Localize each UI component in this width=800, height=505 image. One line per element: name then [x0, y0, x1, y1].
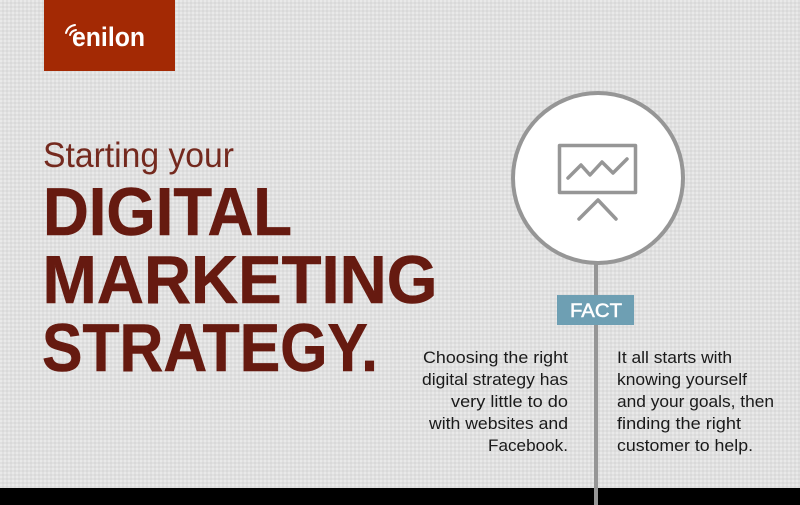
- left fact text: with websites and: [428, 414, 568, 433]
- right fact text: It all starts with: [617, 348, 732, 367]
- left fact text: [422, 348, 568, 455]
- left fact text: Choosing the right: [423, 348, 568, 367]
- icon: presentation chart: [560, 146, 636, 219]
- timeline connector: [594, 262, 598, 505]
- right fact text: customer to help.: [617, 436, 753, 455]
- right fact text: knowing yourself: [617, 370, 747, 389]
- left fact text: digital strategy has: [422, 370, 568, 389]
- title intro line: Starting your: [43, 136, 234, 175]
- title line: marketing: MARKETING: [42, 242, 438, 318]
- left fact text: Facebook.: [488, 436, 568, 455]
- right fact text: [617, 348, 774, 455]
- fact label: [557, 295, 634, 325]
- logo panel: [44, 0, 175, 71]
- title line: digital: DIGITAL: [43, 174, 292, 250]
- footer bar: [0, 488, 800, 505]
- right fact text: finding the right: [617, 414, 741, 433]
- circle icon badge: [513, 93, 683, 263]
- right fact text: and your goals, then: [617, 392, 774, 411]
- left fact text: very little to do: [451, 392, 568, 411]
- title: [42, 136, 438, 386]
- title line: strategy: STRATEGY.: [42, 310, 378, 386]
- icon: signal arcs: [66, 25, 76, 35]
- logo wordmark: enilon: [72, 22, 145, 52]
- fact label: FACT: [570, 301, 622, 322]
